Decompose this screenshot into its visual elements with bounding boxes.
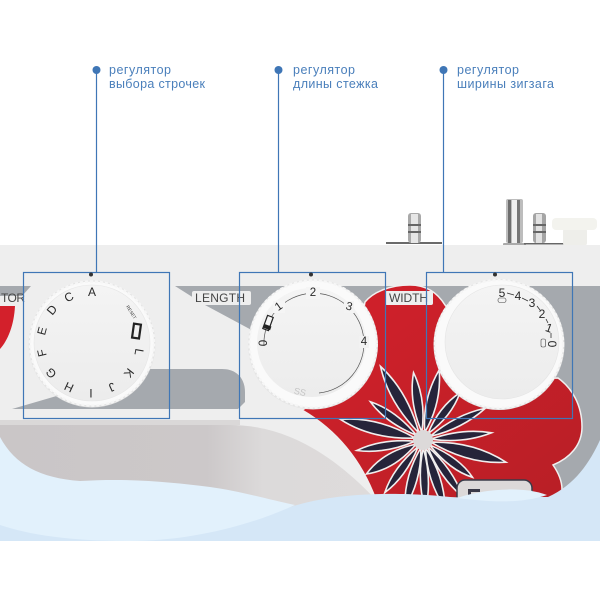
knob: zigzag width: 1 <box>543 320 555 336</box>
label: zigzag width: регулятор <box>457 63 519 77</box>
small light wave <box>457 489 547 501</box>
knob: stitch selector: G <box>43 365 59 381</box>
knob: stitch selector: H <box>62 379 76 395</box>
knob: zigzag width: 2 <box>539 307 546 321</box>
nameplate <box>457 480 532 510</box>
blue wave base <box>0 440 600 541</box>
grey panel band <box>0 286 600 500</box>
label: zigzag width <box>457 63 554 91</box>
red flower petals <box>302 285 582 500</box>
callout frame: zigzag width <box>426 66 572 418</box>
knob: stitch length: 0 <box>258 340 270 346</box>
knob: stitch selector: RESET <box>125 305 137 320</box>
knob: zigzag width: 4 <box>515 289 522 303</box>
TOR label: TOR <box>1 291 25 305</box>
label: stitch selector: регулятор <box>109 63 171 77</box>
knob: stitch selector <box>28 280 156 408</box>
knob: stitch selector: F <box>34 348 50 358</box>
knob: stitch length: SS <box>293 386 307 398</box>
knob: zigzag width: 3 <box>529 296 536 310</box>
knob: zigzag width: 0 <box>545 341 559 348</box>
label: zigzag width: ширины зигзага <box>457 77 554 91</box>
knob: stitch length: 2 <box>310 287 316 299</box>
knob: stitch selector: J <box>106 379 118 395</box>
body seam <box>0 420 240 425</box>
flower spokes <box>339 364 508 510</box>
knob: stitch selector: D <box>44 302 60 318</box>
knob marker dots <box>89 272 497 276</box>
knob: stitch selector: L <box>131 347 146 357</box>
knob: stitch length: 3 <box>344 300 354 314</box>
knob: stitch selector: C <box>62 289 76 305</box>
callout frame: stitch length <box>240 66 386 418</box>
red left petal <box>0 306 15 349</box>
label: stitch selector <box>109 63 206 91</box>
knob: stitch selector: I <box>89 386 93 400</box>
knob: stitch length: 1 <box>273 300 285 314</box>
knob: zigzag width: 5 <box>499 286 506 300</box>
lower body band <box>0 425 376 541</box>
label: stitch length <box>293 63 378 91</box>
knob: zigzag width <box>434 279 564 410</box>
knob: stitch length <box>248 280 378 410</box>
machine body <box>0 245 600 541</box>
label: stitch selector: выбора строчек <box>109 77 206 91</box>
WIDTH label: WIDTH <box>389 291 428 305</box>
knob: stitch selector: K <box>121 366 137 380</box>
light wave <box>0 437 295 541</box>
knob: stitch selector: A <box>88 285 96 299</box>
LENGTH label: LENGTH <box>195 291 245 305</box>
knob: stitch selector: E <box>34 325 50 337</box>
machine accessories: spool pins <box>386 199 597 246</box>
callout frame: stitch selector <box>24 66 170 418</box>
label: stitch length: длины стежка <box>293 77 378 91</box>
label: stitch length: регулятор <box>293 63 355 77</box>
knob: stitch length: 4 <box>361 336 368 348</box>
